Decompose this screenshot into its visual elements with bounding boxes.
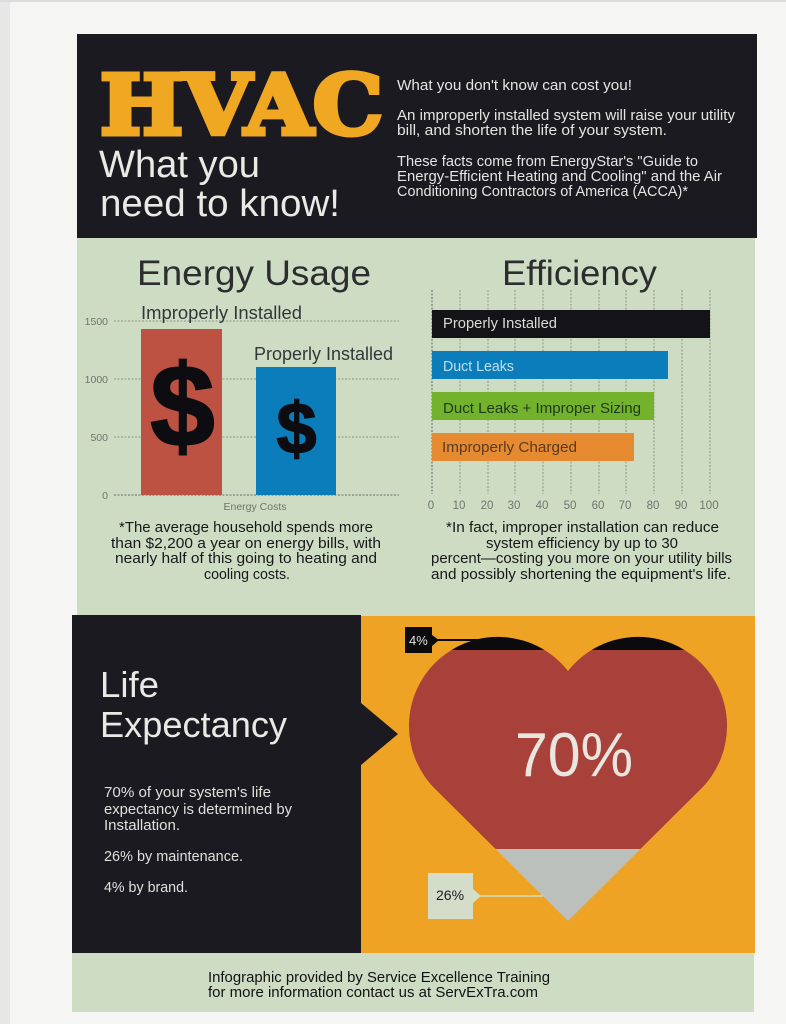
bar: duct leaks + improper sizing: Duct Leaks + Improper Sizing	[443, 401, 641, 417]
bar chart: energy usage	[85, 303, 399, 513]
bar: properly installed	[256, 367, 336, 495]
text block: life expectancy: 70% of your system's life	[104, 785, 271, 801]
caption: energy usage	[111, 520, 381, 583]
caption: efficiency: percent—costing you more on your utility bills	[431, 551, 732, 567]
panel: charts	[77, 238, 755, 616]
header text block: What you don't know can cost you!	[397, 78, 632, 94]
caption: energy usage: *The average household spends more	[119, 520, 373, 536]
bar chart: energy usage: 1000	[85, 374, 108, 386]
footer text: for more information contact us at ServExTra.com	[208, 985, 538, 1001]
panel: footer	[72, 953, 754, 1012]
caption: efficiency: system efficiency by up to 30	[486, 536, 678, 552]
bar chart: efficiency: 0	[428, 500, 434, 512]
heading: Life Expectancy	[100, 664, 287, 745]
text block: life expectancy	[104, 785, 293, 896]
subtitle: What you	[99, 144, 260, 186]
heart chart	[409, 636, 727, 921]
bar chart: efficiency: 60	[592, 500, 604, 512]
bar: duct leaks: Duct Leaks	[443, 359, 514, 375]
bar: properly installed	[432, 310, 710, 338]
bar label: Properly Installed	[254, 344, 393, 364]
header text block: An improperly installed system will raise your utility	[397, 108, 736, 124]
caption: efficiency	[431, 520, 732, 583]
bar chart: efficiency: 100	[699, 500, 719, 512]
bar chart: energy usage: 500	[90, 432, 108, 444]
bar chart: efficiency: 80	[647, 500, 659, 512]
caption: energy usage: nearly half of this going to heating and	[115, 551, 377, 567]
panel: heart graphic	[361, 616, 755, 953]
text block: life expectancy: 26% by maintenance.	[104, 849, 243, 865]
callout: 26%: 26%	[436, 887, 464, 903]
footer text: Infographic provided by Service Excellence Training	[208, 970, 550, 986]
bar chart: efficiency: 10	[453, 500, 465, 512]
bar chart: efficiency: 40	[536, 500, 548, 512]
heading: Life Expectancy: Life	[100, 664, 159, 705]
text block: life expectancy: expectancy is determined by	[104, 802, 293, 818]
heading: Efficiency: Efficiency	[502, 254, 658, 293]
bar chart: efficiency	[428, 290, 719, 512]
caption: efficiency: and possibly shortening the equipment's life.	[431, 567, 731, 583]
text block: life expectancy: Installation.	[104, 818, 180, 834]
bar label: Improperly Installed	[141, 303, 302, 323]
bar: improperly charged	[432, 433, 634, 461]
bar chart: efficiency: 20	[481, 500, 493, 512]
heading: Energy Usage: Energy Usage	[137, 254, 371, 293]
callout: 26%	[428, 873, 543, 919]
bar chart: efficiency: 30	[508, 500, 520, 512]
panel: header	[77, 34, 757, 238]
text block: life expectancy: 4% by brand.	[104, 880, 188, 896]
header text block: bill, and shorten the life of your system.	[397, 123, 667, 139]
header text block: These facts come from EnergyStar's "Guide to	[397, 154, 698, 170]
caption: energy usage: cooling costs.	[204, 567, 290, 583]
bar chart: efficiency: 70	[619, 500, 631, 512]
title: HVAC: HVAC	[100, 58, 383, 154]
bar: improperly installed: $	[150, 341, 215, 471]
heading: Life Expectancy: Expectancy	[100, 704, 287, 745]
callout: 4%: 4%	[409, 633, 428, 648]
bar: improperly installed	[141, 329, 222, 495]
subtitle	[99, 144, 340, 225]
callout: 4%	[405, 627, 482, 653]
header text block: Energy-Efficient Heating and Cooling" and the Air	[397, 169, 722, 185]
panel: life expectancy text	[72, 615, 361, 953]
arrow	[361, 703, 398, 765]
bar: duct leaks	[432, 351, 668, 379]
caption: efficiency: *In fact, improper installation can reduce	[446, 520, 719, 536]
subtitle: need to know!	[100, 183, 340, 225]
bar chart: efficiency: 90	[675, 500, 687, 512]
bar: improperly charged: Improperly Charged	[442, 440, 577, 456]
axis label: Energy Costs	[223, 501, 287, 513]
caption: energy usage: than $2,200 a year on energy bills, with	[111, 536, 381, 552]
header text block	[397, 78, 736, 200]
bar chart: efficiency: 50	[564, 500, 576, 512]
value: 70%: 70%	[515, 721, 633, 790]
footer text	[208, 970, 550, 1001]
bar chart: energy usage: 0	[102, 490, 108, 502]
bar: properly installed: Properly Installed	[443, 316, 557, 332]
bar chart: energy usage: 1500	[85, 316, 108, 328]
bar: duct leaks + improper sizing	[432, 392, 654, 420]
header text block: Conditioning Contractors of America (ACCA)*	[397, 184, 688, 200]
bar: properly installed: $	[276, 389, 317, 469]
